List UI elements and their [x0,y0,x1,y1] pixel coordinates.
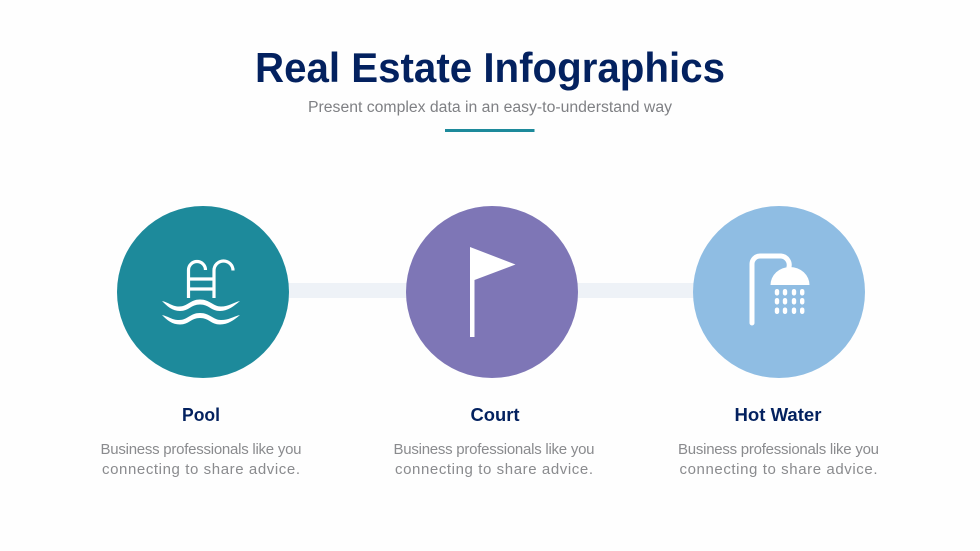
pool description [100,441,302,478]
hot water circle [693,206,865,378]
pool circle [117,206,289,378]
court description: Business professionals like you [394,441,594,458]
hot water description: connecting to share advice. [680,461,878,478]
panel: pool [100,206,302,478]
hot water description [678,441,879,478]
court heading: Court [470,404,520,425]
title underline [445,129,534,132]
icon: flag [470,247,516,337]
title: Real Estate Infographics [255,44,725,91]
hot water description: Business professionals like you [678,441,879,458]
icon: shower [752,256,810,323]
court description [394,441,594,478]
pool description: connecting to share advice. [102,461,300,478]
connector bar [285,283,695,298]
panel: hot water [678,206,879,478]
court circle [406,206,578,378]
pool description: Business professionals like you [100,441,302,458]
court description: connecting to share advice. [395,461,593,478]
pool heading: Pool [182,404,220,425]
subtitle: Present complex data in an easy-to-understand way [308,99,672,116]
hot water heading: Hot Water [734,404,822,425]
icon: pool ladder and water [162,261,240,324]
panel: court [394,206,594,478]
